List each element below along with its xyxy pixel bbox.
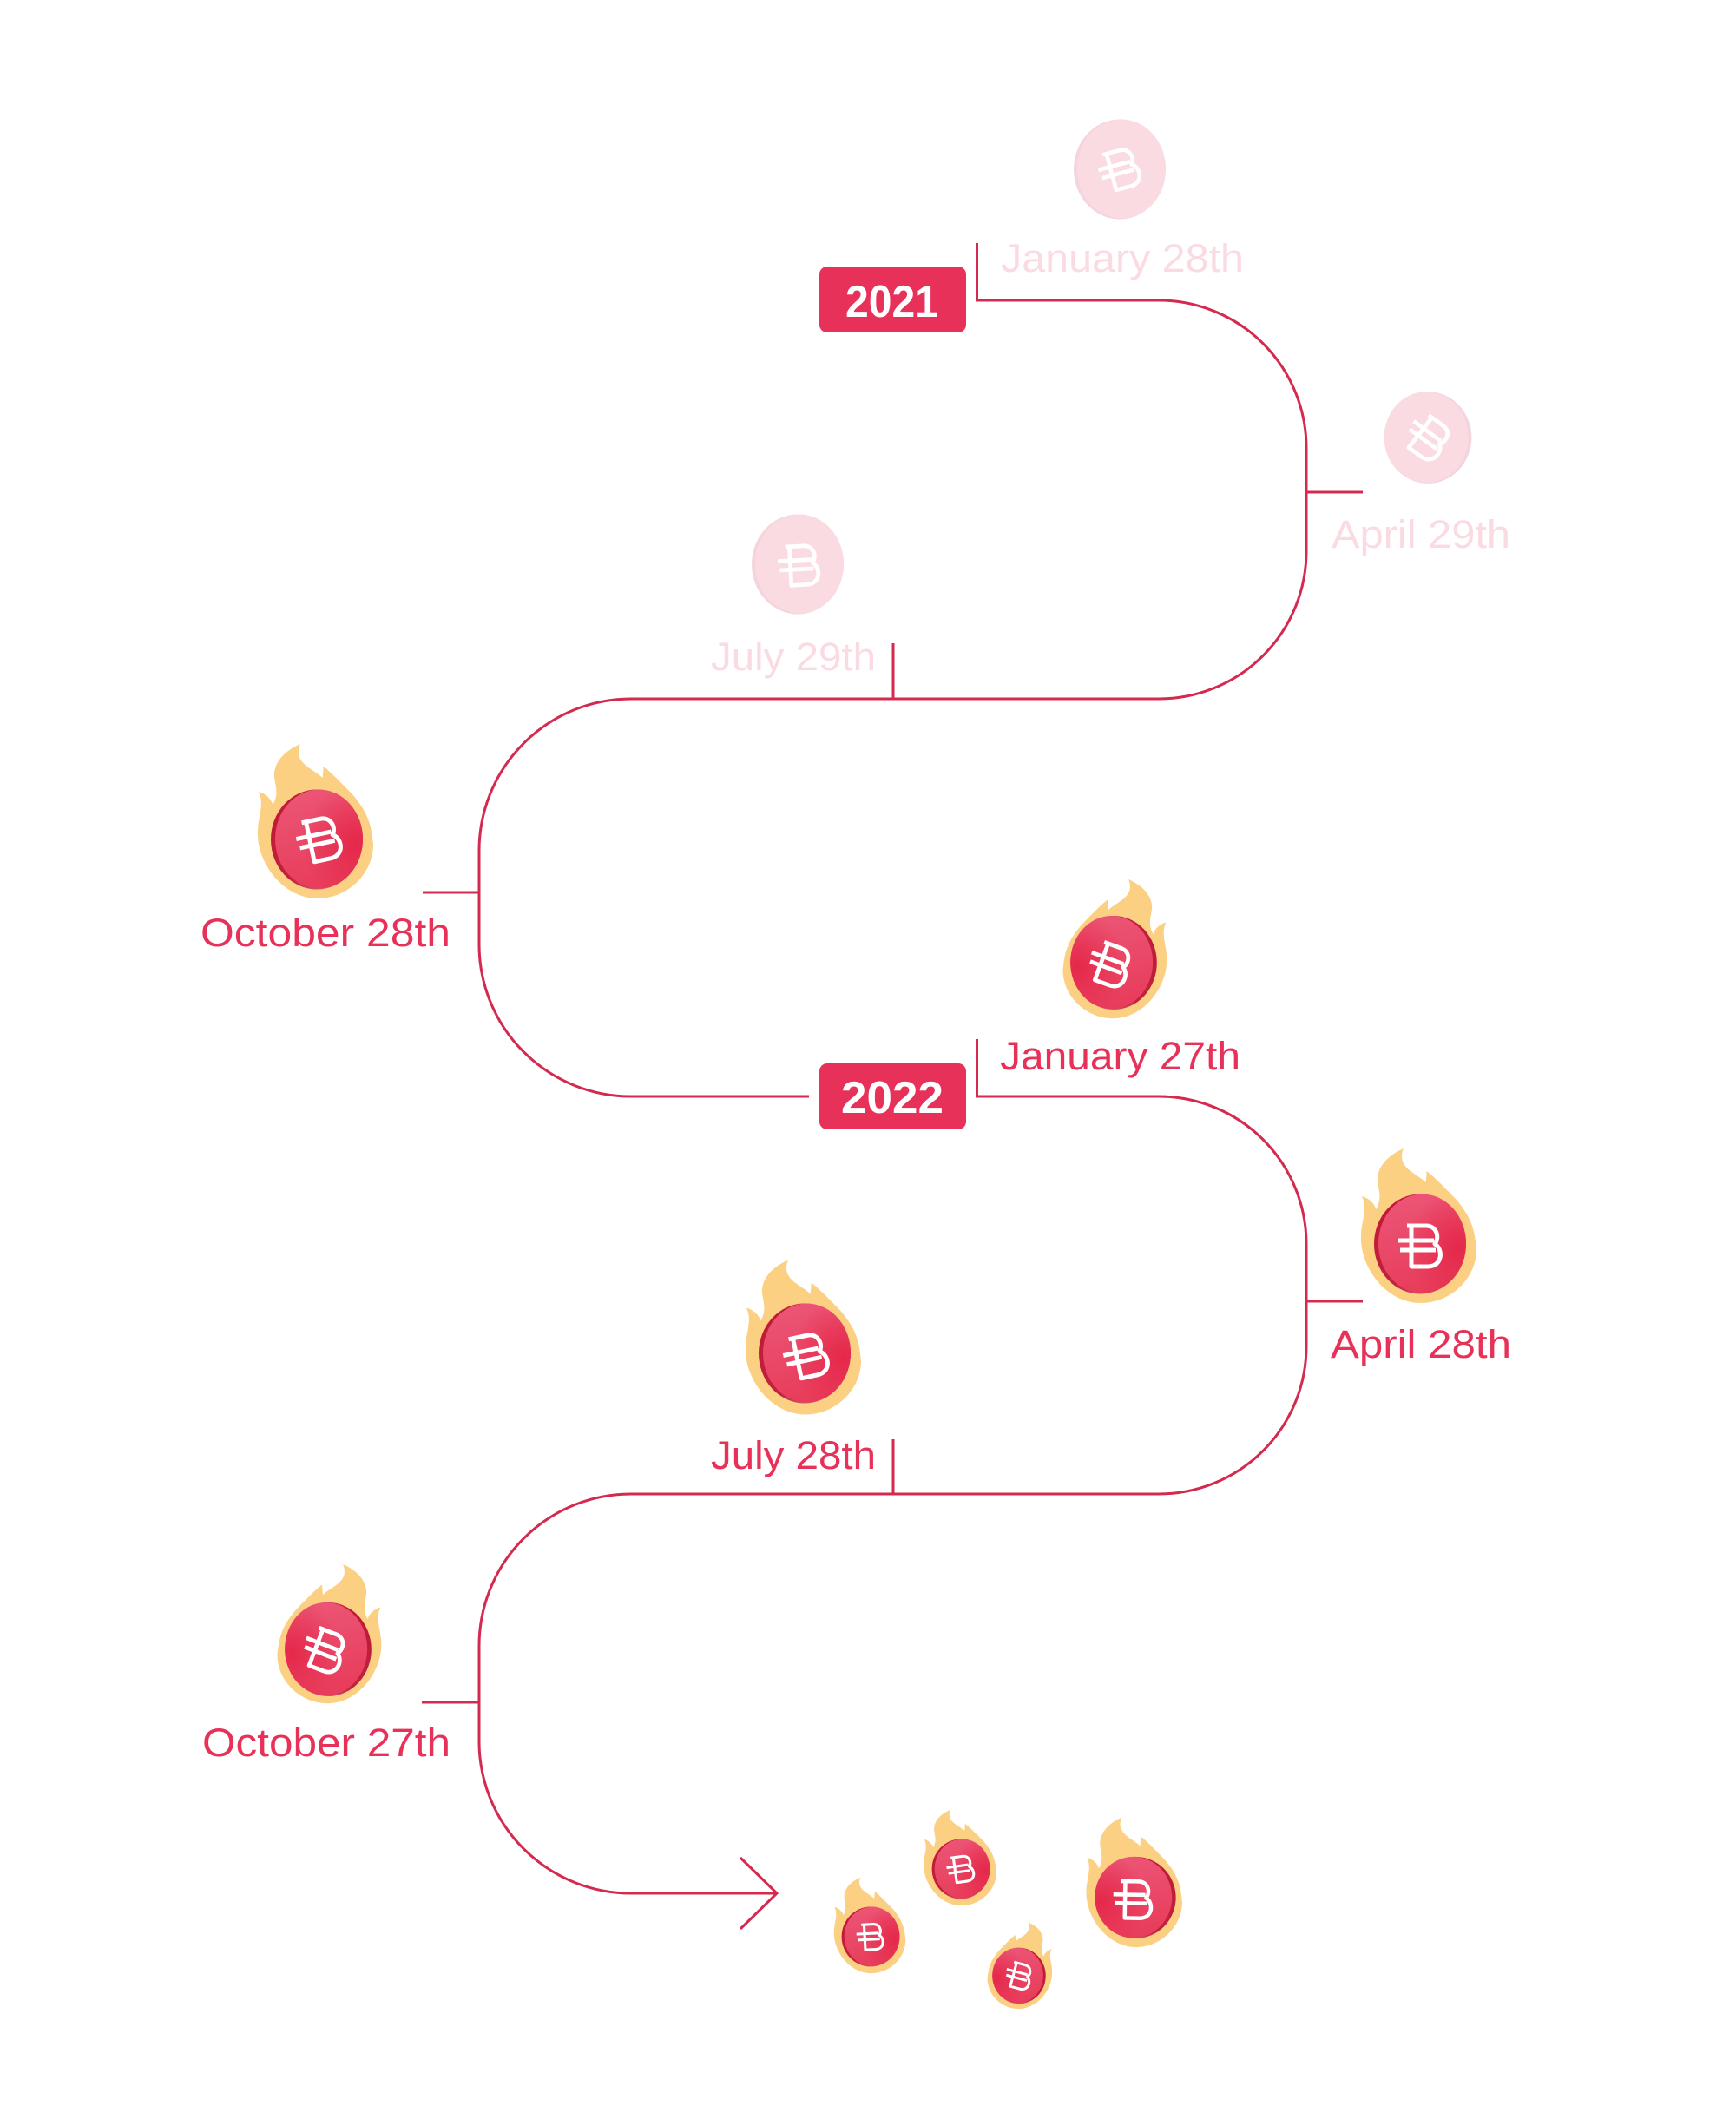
timeline path <box>422 243 1363 1893</box>
label: January 27th: January 27th <box>1000 1034 1240 1078</box>
label: April 28th: April 28th <box>1331 1322 1511 1366</box>
badge: 2022 <box>819 1063 966 1129</box>
burning coin: April 28th <box>1361 1148 1476 1303</box>
badge: 2021 <box>819 267 966 332</box>
coin: July 29th (unburned) <box>752 514 844 615</box>
label: October 28th: October 28th <box>201 911 450 955</box>
arrow head <box>740 1858 777 1929</box>
burning coin: January 27th <box>1062 879 1167 1018</box>
label: January 28th: January 28th <box>1001 236 1244 280</box>
burning coin: final group bottom <box>988 1922 1052 2009</box>
badge: 2022: 2022 <box>841 1073 944 1123</box>
burning coin: final group top <box>924 1810 996 1905</box>
label: April 29th: April 29th <box>1332 512 1510 556</box>
label: July 29th: July 29th <box>711 635 876 679</box>
burning coin: July 28th <box>746 1260 861 1415</box>
label: July 28th: July 28th <box>711 1433 876 1477</box>
coin: January 28th (unburned) <box>1074 120 1166 219</box>
badge: 2021: 2021 <box>845 277 938 327</box>
coin: April 29th (unburned) <box>1384 392 1471 484</box>
burning coin: final group small left <box>834 1878 905 1973</box>
label: October 27th: October 27th <box>202 1721 450 1765</box>
burning coin: October 28th <box>258 744 373 898</box>
burning coin: final group large right <box>1086 1818 1182 1947</box>
burning coin: October 27th <box>278 1564 381 1703</box>
